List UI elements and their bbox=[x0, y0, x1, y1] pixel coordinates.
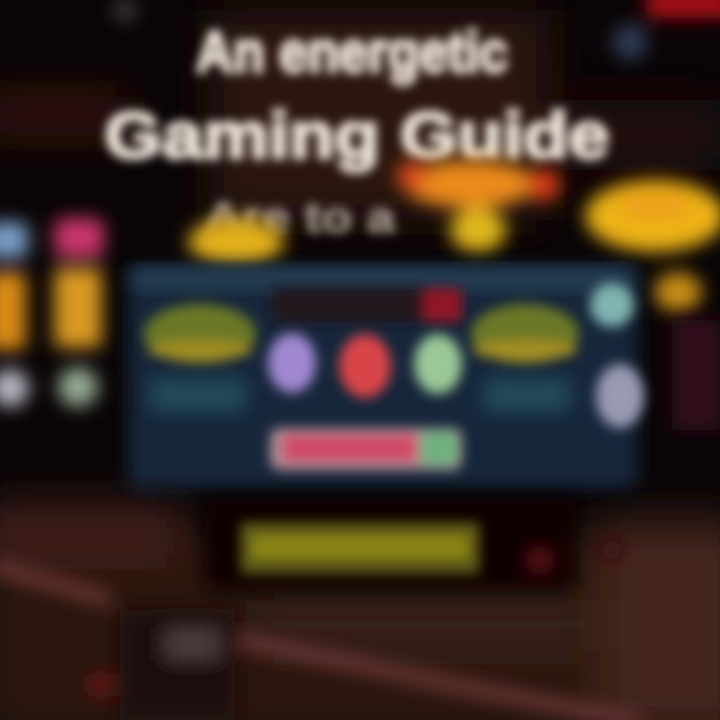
red indicator lights bbox=[525, 539, 623, 575]
coloured button bar bbox=[270, 428, 462, 470]
right side red cabinet bbox=[672, 320, 720, 430]
left machine two bbox=[54, 218, 104, 407]
decorative lamps bbox=[188, 160, 720, 312]
left machine one bbox=[0, 222, 29, 407]
lamp centre bbox=[397, 160, 560, 252]
left gold dome bbox=[144, 304, 256, 364]
pale symbol bbox=[596, 364, 644, 428]
right gold dome bbox=[471, 304, 579, 364]
central machine panel bbox=[128, 266, 638, 488]
lamp left bbox=[188, 218, 284, 266]
right side symbols bbox=[590, 283, 644, 428]
reel symbols bbox=[268, 333, 462, 398]
teal symbol bbox=[590, 283, 634, 327]
lower plate bbox=[205, 498, 623, 590]
yellow plaque bbox=[240, 522, 480, 574]
green symbol bbox=[414, 334, 462, 394]
red symbol bbox=[339, 334, 391, 398]
title line 3: Are to a bbox=[205, 193, 396, 242]
title line 1: An energetic bbox=[196, 20, 508, 85]
left side machines bbox=[0, 218, 104, 407]
purple symbol bbox=[268, 333, 316, 393]
display bar bbox=[272, 288, 462, 322]
left caption block bbox=[150, 378, 246, 412]
right caption block bbox=[484, 378, 570, 412]
panel top highlight bbox=[132, 268, 632, 290]
title bbox=[104, 20, 610, 242]
title line 2: Gaming Guide bbox=[104, 98, 610, 172]
lamp right bbox=[585, 180, 720, 312]
